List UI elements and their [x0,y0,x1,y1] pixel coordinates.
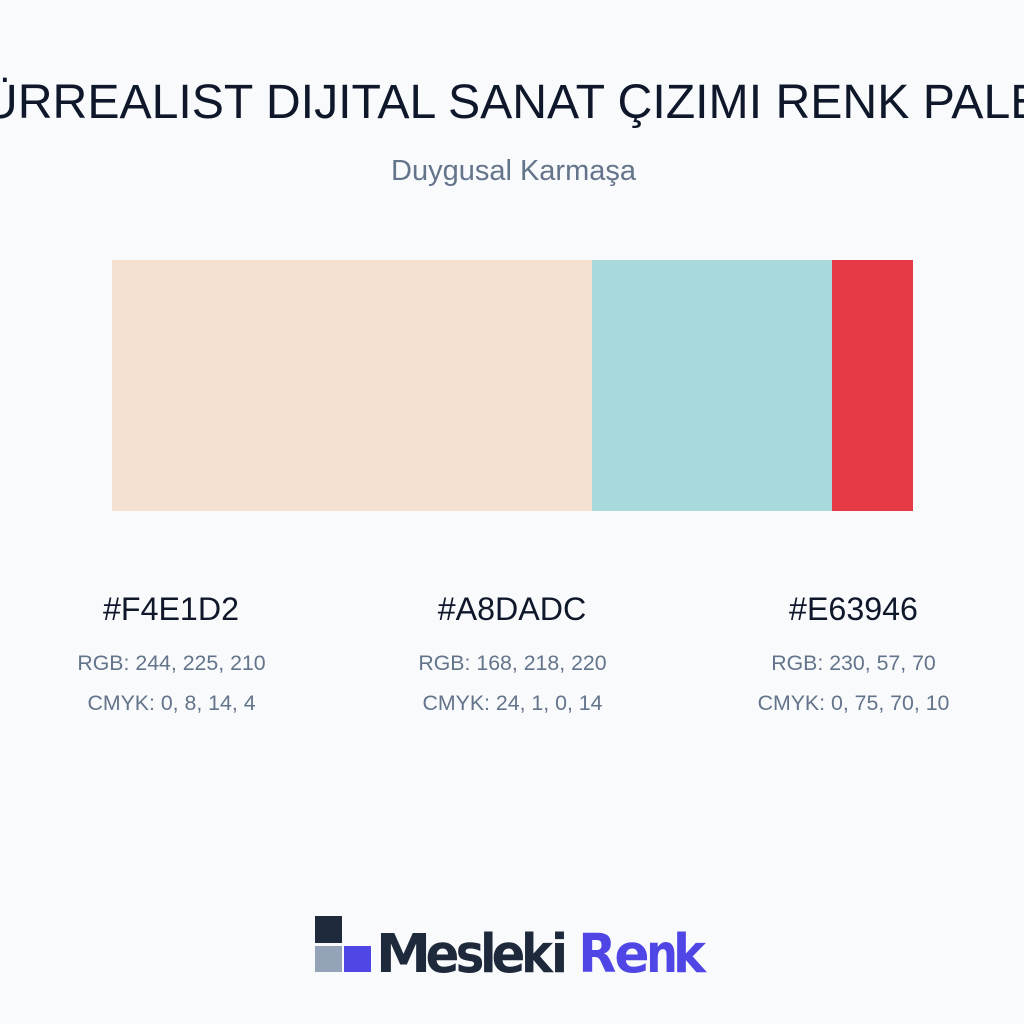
palette bar [112,260,913,511]
logo wordmark [376,922,707,985]
swatch: F4E1D2 [112,260,592,511]
subtitle: Duygusal Karmaşa [391,155,636,187]
swatch: A8DADC [592,260,832,511]
colour details: A8DADC: RGB: 168, 218, 220 [418,651,607,675]
colour details: A8DADC: #A8DADC [438,591,586,627]
logo wordmark: l [480,922,497,985]
colour details: E63946: CMYK: 0, 75, 70, 10 [758,691,949,715]
logo wordmark: i [551,922,568,985]
colour details: A8DADC: CMYK: 24, 1, 0, 14 [423,691,602,715]
colour details: F4E1D2: CMYK: 0, 8, 14, 4 [87,691,256,715]
colour details: F4E1D2 [77,591,266,715]
colour details: E63946: RGB: 230, 57, 70 [771,651,936,675]
logo wordmark: e [492,922,525,985]
colour details: E63946: #E63946 [789,591,918,627]
swatch: E63946 [832,260,913,511]
colour details: A8DADC [418,591,607,715]
logo wordmark: e [426,922,459,985]
logo wordmark: k [521,922,554,985]
logo wordmark: k [673,922,707,985]
logo wordmark: n [646,922,678,985]
logo wordmark: s [456,922,484,985]
icon: logo squares [315,916,371,972]
logo wordmark: M [376,922,431,985]
logo wordmark: R [578,922,616,985]
colour details: F4E1D2: #F4E1D2 [103,591,239,627]
colour details: E63946 [758,591,949,715]
colour details: F4E1D2: RGB: 244, 225, 210 [77,651,266,675]
logo [315,916,707,985]
logo wordmark: e [614,922,650,985]
